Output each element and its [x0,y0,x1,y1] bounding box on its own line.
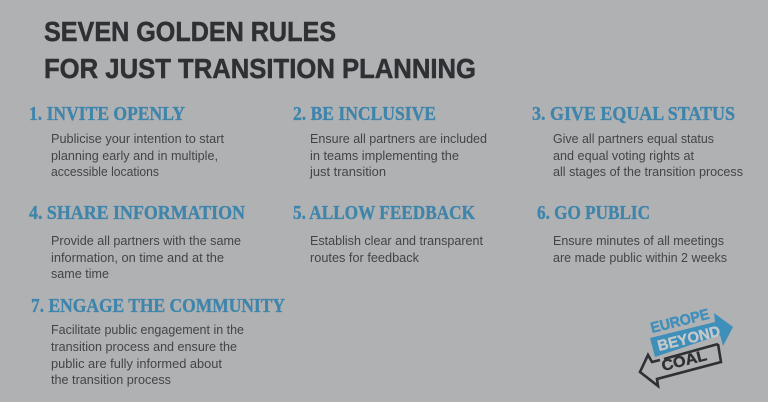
logo word: Beyond: BEYOND [656,323,722,355]
rule 2: be inclusive: Ensure all partners are included [310,131,487,146]
logo word: Europe: EUROPE [649,306,711,337]
rule 1: invite openly [29,104,224,179]
rule 6: go public [537,203,727,265]
rule 4: share information: 4. SHARE INFORMATION [29,203,245,224]
rule 7: engage the community: the transition process [51,372,171,387]
rule 3: give equal status: all stages of the transition process [553,164,743,179]
rule 6: go public: Ensure minutes of all meetings [553,233,724,248]
logo word: Coal: COAL [660,347,709,375]
rule 1: invite openly: planning early and in multiple, [51,148,218,163]
rule 5: allow feedback [293,203,483,265]
rule 3: give equal status: 3. GIVE EQUAL STATUS [532,104,735,125]
rule 6: go public: are made public within 2 weeks [553,250,727,265]
rule 3: give equal status: and equal voting rights at [553,148,694,163]
rule 7: engage the community: transition process and ensure the [51,339,237,354]
rule 1: invite openly: accessible locations [51,164,159,179]
rule 4: share information [29,203,245,281]
rule 4: share information: same time [51,266,109,281]
rule 3: give equal status: Give all partners equal status [553,131,714,146]
rule 1: invite openly: 1. INVITE OPENLY [29,104,185,125]
title: SEVEN GOLDEN RULES [44,16,336,47]
rule 7: engage the community: public are fully informed about [51,356,222,371]
rule 6: go public: 6. GO PUBLIC [537,203,650,224]
rule 3: give equal status [532,104,743,179]
icon: blue arrow pointing right [650,313,733,357]
rule 5: allow feedback: 5. ALLOW FEEDBACK [293,203,476,224]
rule 2: be inclusive: just transition [309,164,386,179]
rule 7: engage the community: 7. ENGAGE THE COMMUNITY [31,296,285,317]
title: FOR JUST TRANSITION PLANNING [44,53,476,84]
title [44,16,476,84]
rule 1: invite openly: Publicise your intention to start [51,131,224,146]
rule 5: allow feedback: Establish clear and transparent [310,233,483,248]
icon: dark outlined arrow pointing left [640,344,721,386]
rule 5: allow feedback: routes for feedback [310,250,419,265]
rule 2: be inclusive [293,104,487,179]
rule 7: engage the community [31,296,285,387]
logo: Europe Beyond Coal [640,306,733,386]
rule 7: engage the community: Facilitate public engagement in the [51,322,244,337]
rule 4: share information: Provide all partners with the same [51,233,241,248]
rule 2: be inclusive: in teams implementing the [310,148,459,163]
rule 4: share information: information, on time and at the [51,250,224,265]
rule 2: be inclusive: 2. BE INCLUSIVE [293,104,436,125]
